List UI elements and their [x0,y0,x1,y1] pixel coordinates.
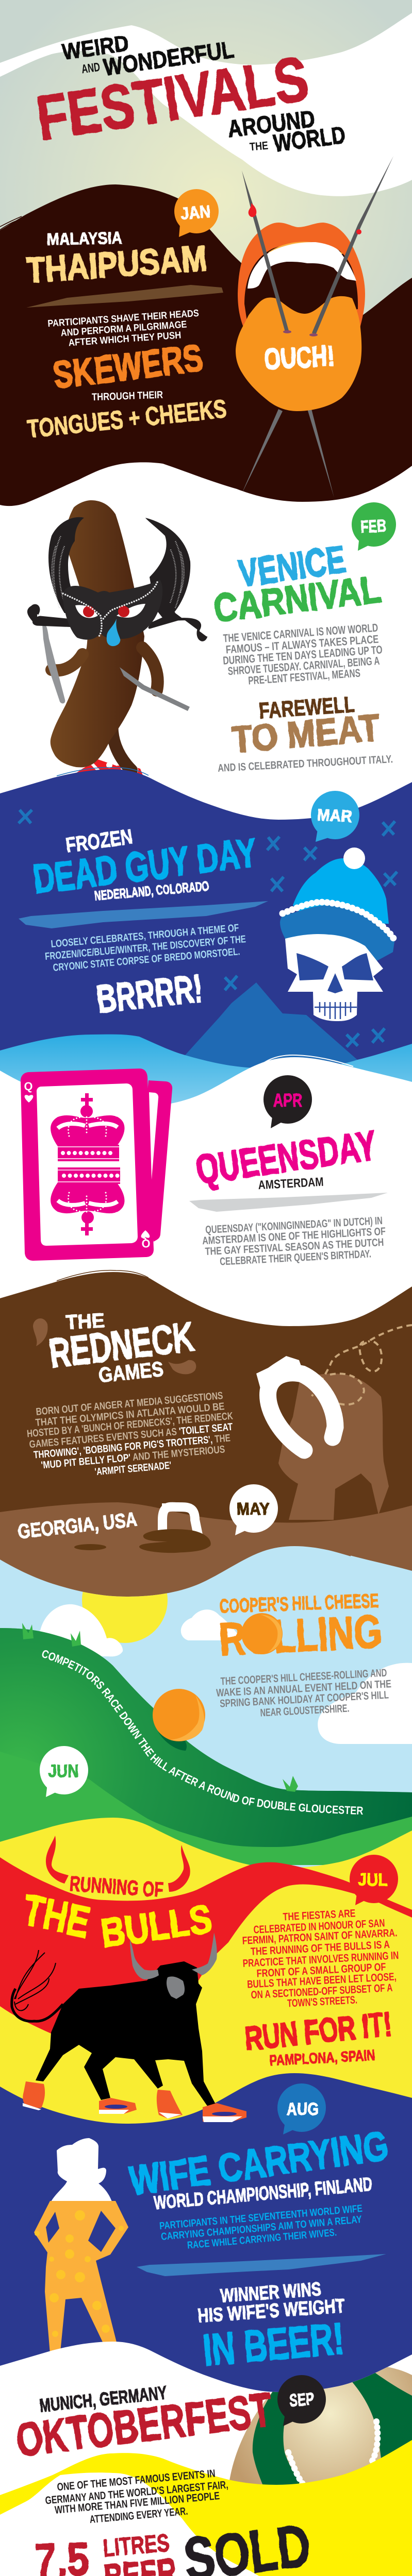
body text [242,1907,399,2010]
brush stroke divider [19,901,268,928]
back card inner [149,1092,158,1180]
feather highlights [52,536,184,608]
body text [44,922,246,974]
month bubble: feb: FEB [360,516,387,537]
band: white [0,2342,412,2576]
body text [202,1215,386,1268]
month bubble: sep: SEP [289,2389,315,2410]
card pip: q bottom: Q [141,1237,151,1250]
mask [63,580,162,640]
blood drop two [356,229,361,234]
body text: FROZEN/ICE/BLUE/WINTER, THE DISCOVERY OF THE [44,934,246,962]
heading: redneck: REDNECK [46,1313,196,1377]
illustration: mouth with skewers [236,156,393,498]
knife [42,624,65,703]
beads [63,582,157,636]
body text: TOWN'S STREETS. [287,1994,358,2010]
month bubble: feb [352,502,396,551]
title: and: AND [80,60,101,76]
hill shaded surface [0,1628,412,1847]
illustration: dirndl [228,2365,412,2488]
panel: july running of the bulls [12,1836,399,2122]
highlight: to meat: TO MEAT [230,707,382,761]
teeth lines [315,1002,357,1019]
bull body [36,1961,216,2107]
body text: AND PERFORM A PILGRIMAGE [60,319,187,339]
card pip: heart top [25,1095,33,1103]
shoes [73,759,144,778]
highlight: in beer: IN BEER! [201,2314,346,2376]
title: the: THE [249,139,269,154]
brush stroke divider [26,285,223,308]
band: red swoosh [0,1857,412,2035]
body text: GERMANY AND THE WORLD'S LARGEST FAIR, [45,2479,228,2506]
body text [216,1667,391,1719]
mountain [175,982,371,1072]
cheese letter o [241,1613,283,1654]
panel: august wife carrying [34,2083,391,2376]
left arm [52,654,83,670]
heading: the: THE [19,1885,94,1946]
body text: WITH MORE THAN FIVE MILLION PEOPLE [54,2490,220,2516]
horn right [192,1933,217,1975]
month bubble: aug [277,2083,326,2134]
month bubble: jun: JUN [48,1761,78,1781]
middle cloud [181,1609,241,1640]
month bubble: aug: AUG [287,2099,319,2119]
toilet seat [256,1356,335,1450]
month bubble: mar: MAR [317,805,353,826]
droplet left [33,1318,48,1346]
background: top sage gradient [0,0,412,361]
body text: THAT THE OLYMPICS IN ATLANTA WOULD BE [35,1401,225,1429]
lace right [371,2421,377,2463]
heading: carnival: CARNIVAL [211,567,383,631]
body text: 'ARMPIT SERENADE' [94,1460,172,1478]
ground [0,1502,412,1597]
card face [37,1083,138,1246]
grass tufts [22,1623,298,1792]
body text: BORN OUT OF ANGER AT MEDIA SUGGESTIONS [36,1390,223,1418]
location: munich: MUNICH, GERMANY [39,2382,168,2416]
body text: LOOSELY CELEBRATES, THROUGH A THEME OF [51,922,239,950]
feather wing right [145,518,190,621]
illustration: skull with beanie [280,848,395,1021]
highlight: his wife's weight: HIS WIFE'S WEIGHT [197,2295,345,2327]
card pip: heart bottom [141,1230,150,1238]
mouth interior [244,243,358,325]
nose [327,973,343,993]
body text [45,2468,228,2526]
teardrop [107,619,120,646]
location: NEDERLAND, COLORADO [94,878,209,904]
body text [222,621,383,687]
band: july yellow [0,1818,412,2254]
title: world: WORLD [272,121,347,157]
illustration: redneck head silhouette [278,1374,389,1520]
body text: PRE-LENT FESTIVAL, MEANS [248,666,361,687]
skull [285,934,383,1021]
band: dark brown [0,184,412,515]
highlight: brrrr: BRRRR! [94,967,205,1022]
highlight: skewers: SKEWERS [51,336,205,397]
heading: oktoberfest: OKTOBERFEST [13,2383,275,2467]
panel: april queensday [0,1035,412,1380]
body text: ONE OF THE MOST FAMOUS EVENTS IN [57,2468,216,2493]
body text: ATTENDING EVERY YEAR. [89,2505,188,2526]
heading: frozen: FROZEN [64,824,134,857]
band: white [0,462,412,824]
dashed rope loop [312,1325,412,1404]
piercing hole two [309,333,318,336]
rear leg [112,721,131,770]
illustration: woman silhouette [34,2138,128,2353]
title: festivals: FESTIVALS [32,44,312,153]
piercing holes [283,330,291,333]
band: light blue [0,1035,412,1133]
heading: running of: RUNNING OF [69,1872,164,1902]
body text: THROWING', 'BOBBING FOR PIG'S TROTTERS', THE [33,1432,231,1461]
black arms [28,605,206,640]
location: georgia usa: GEORGIA, USA [17,1509,138,1543]
sneakers [23,2081,246,2122]
band: blue [0,769,412,1154]
eye right [118,606,129,617]
front card [21,1069,154,1261]
white brush swoosh [0,13,412,196]
month bubble: mar [311,791,359,842]
band: august navy [0,2073,412,2447]
left cloud [31,1604,123,1656]
lower skewers [241,409,334,498]
panel: january thaipusam [0,156,412,515]
eye sockets [296,953,373,980]
horn left [130,1940,159,1979]
month bubble: may: MAY [237,1499,270,1518]
body text [26,1390,234,1478]
sausage body [51,500,144,767]
yellow swoosh [0,2440,412,2576]
body text: GAMES FEATURES EVENTS SUCH AS 'TOILET SEAT [29,1421,233,1450]
band: brown [0,1272,412,1525]
right arm [142,648,158,690]
mud puddle [139,1529,211,1553]
band: white [0,1057,412,1380]
upper teeth yellow [268,242,343,260]
back card [139,1080,172,1242]
mask eye holes [75,604,145,618]
eyes [83,606,94,617]
brush stroke divider [137,2254,386,2276]
body text: NEAR GLOUSTERSHIRE. [260,1702,350,1719]
horn ornament right [168,1845,190,1892]
body text: AFTER WHICH THEY PUSH [68,330,182,349]
heading: games: GAMES [97,1357,164,1387]
sky band over ground [0,1546,412,1920]
body text: CARRYING CHAMPIONSHIPS AIM TO WIN A RELAY [160,2214,362,2243]
lips [238,223,365,330]
teeth [248,242,356,289]
illustration: masked sausage [28,500,206,778]
location: malaysia: MALAYSIA [47,229,122,248]
green strap left [253,2392,300,2485]
card pip: q top: Q [24,1080,33,1093]
tongue [236,296,361,411]
upper skewers [242,156,393,335]
feather wing left [48,517,84,613]
body text: CRYONIC STATE CORPSE OF BREDO MORSTOEL. [53,946,240,974]
label: ouch: OUCH! [263,339,335,376]
panel: march frozen dead guy day [0,768,412,1154]
panel: september oktoberfest [0,2342,412,2576]
month bubble: apr [263,1075,312,1128]
right cloud [318,1663,412,1744]
big cheese shadow [158,1731,187,1751]
horn ornament left [46,1836,69,1884]
beanie dome [293,858,389,924]
small toilet seat [162,1503,199,1537]
fork [120,667,190,711]
text: through their: THROUGH THEIR [92,389,163,403]
body text: THE FIESTAS ARE [283,1907,356,1923]
illustration: queen playing cards [21,1069,172,1261]
tail hair [14,1950,56,2010]
tail [12,1989,63,2021]
month bubble: sep [277,2375,326,2426]
body text: HOSTED BY A 'BUNCH OF REDNECKS', THE REDNECK [26,1411,234,1439]
body text: RACE WHILE CARRYING THEIR WIVES. [187,2227,337,2251]
muzzle [167,1976,185,1999]
crown top [49,1093,126,1161]
body text [159,2203,363,2251]
heading: bulls: BULLS [98,1895,215,1956]
lace [288,2452,304,2486]
stat: 7.5 million litres beer sold: LITRES [102,2529,171,2563]
panel: may redneck games [0,1270,412,1597]
panel: february venice carnival [0,462,412,824]
skin [228,2365,412,2488]
beanie band [280,905,394,961]
hill base [0,1628,412,1865]
month bubble: jan [174,189,219,237]
title: wonderful: WONDERFUL [102,36,236,80]
big cheese [153,1689,205,1741]
stat: 7.5 million litres beer sold [34,2512,314,2576]
sun and clouds [39,1592,412,1744]
title: weird: WEIRD [60,30,130,65]
body text: PARTICIPANTS SHAVE THEIR HEADS [47,308,199,329]
highlight: winner wins: WINNER WINS [220,2278,322,2307]
highlight: tongues and cheeks: TONGUES + CHEEKS [26,394,228,444]
small puddle [74,1544,106,1550]
heading: dead guy day: DEAD GUY DAY [30,829,259,902]
head and hair [51,2138,112,2201]
sun [82,1592,168,1643]
beer bubbles [35,2210,124,2337]
crown bottom mirrored [49,1167,126,1235]
pompom [343,848,365,869]
month bubble: jul: JUL [358,1870,388,1890]
location: amsterdam: AMSTERDAM [258,1175,324,1192]
month bubble: apr: APR [273,1090,302,1111]
body text [47,308,199,349]
green strap right [352,2373,412,2458]
beanie fringe [283,902,395,942]
heading: venice: VENICE [236,537,348,595]
droplet right [168,1360,196,1374]
brush stroke divider [189,1193,388,1212]
body text: 'MUD PIT BELLY FLOP' AND THE MYSTERIOUS [41,1444,225,1471]
month bubble: jun [40,1746,88,1797]
heading: thaipusam: THAIPUSAM [25,238,208,291]
highlight: farewell: FAREWELL [258,692,356,723]
panel: june cooper's hill cheese rolling [0,1546,412,1867]
blood drop one [249,203,256,217]
heading: the: THE [65,1310,105,1334]
title: around: AROUND [226,105,317,142]
curved caption: COMPETITORS RACE DOWN THE HILL AFTER A ROUND OF DOUBLE GLOUCESTER [42,1650,363,1815]
month bubble: jul [350,1855,398,1905]
illustration: bull in sneakers [12,1933,246,2122]
location: pamplona: PAMPLONA, SPAIN [269,2047,375,2069]
beer filled body [34,2201,128,2353]
panel: title header [0,13,412,196]
month bubble: may [229,1484,278,1535]
month bubble: jan: JAN [180,202,211,224]
snow crosses [19,810,397,1047]
